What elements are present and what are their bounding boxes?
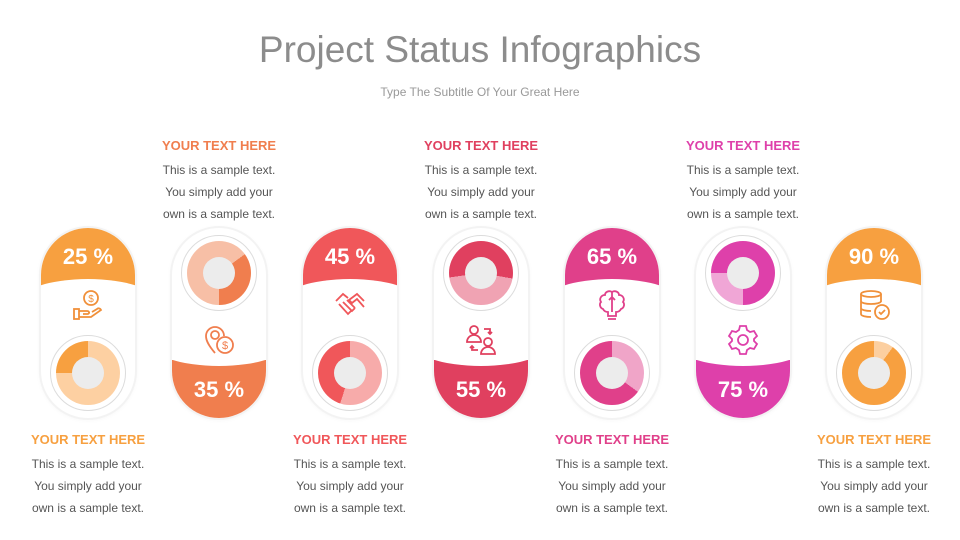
donut 45% [312,335,388,411]
donut 25% [50,335,126,411]
icon: handshake [335,292,365,316]
text block 5: You simply add your [558,479,666,493]
text block 2: This is a sample text. [163,163,275,177]
pill 6 [696,228,790,418]
pill 2 [172,228,266,418]
text block 5: own is a sample text. [556,501,668,515]
text block 3: This is a sample text. [294,457,406,471]
pill 7 [827,228,921,418]
text block 2: You simply add your [165,185,273,199]
text block 2: own is a sample text. [163,207,275,221]
text block 3: YOUR TEXT HERE [293,432,407,447]
text block 7: own is a sample text. [818,501,930,515]
text block 1: You simply add your [34,479,142,493]
text block 4: This is a sample text. [425,163,537,177]
text block 6: This is a sample text. [687,163,799,177]
text block 3 [293,432,407,515]
text block 7: YOUR TEXT HERE [817,432,931,447]
text block 4: YOUR TEXT HERE [424,138,538,153]
text block 4 [424,138,538,221]
pill 1: 25 % [63,244,113,269]
donut 65% [574,335,650,411]
icon: hand coin: $ [88,294,94,305]
text block 6 [686,138,800,221]
donut 75% [705,235,781,311]
pill 2: 35 % [194,377,244,402]
icon: gear [728,325,758,355]
pill 6: 75 % [718,377,768,402]
text block 7 [817,432,931,515]
pill 5: 65 % [587,244,637,269]
pill 3: 45 % [325,244,375,269]
title: Project Status Infographics [259,29,701,70]
text block 5 [555,432,669,515]
pill 5 [565,228,659,418]
text block 2 [162,138,276,221]
text block 1: own is a sample text. [32,501,144,515]
text block 6: You simply add your [689,185,797,199]
text block 5: This is a sample text. [556,457,668,471]
text block 7: You simply add your [820,479,928,493]
text block 3: You simply add your [296,479,404,493]
text block 1: YOUR TEXT HERE [31,432,145,447]
pill 3 [303,228,397,418]
text block 4: You simply add your [427,185,535,199]
donut 35% [181,235,257,311]
subtitle: Type The Subtitle Of Your Great Here [380,85,580,99]
pill 4 [434,228,528,418]
pill 1 [41,228,135,418]
text block 2: YOUR TEXT HERE [162,138,276,153]
text block 7: This is a sample text. [818,457,930,471]
pill 4: 55 % [456,377,506,402]
text block 4: own is a sample text. [425,207,537,221]
pill 7: 90 % [849,244,899,269]
icon: location dollar: $ [222,340,228,352]
text block 1: This is a sample text. [32,457,144,471]
text block 1 [31,432,145,515]
donut 90% [836,335,912,411]
donut 55% [443,235,519,311]
icon: database check [860,290,890,320]
icon: location dollar [205,326,234,354]
text block 3: own is a sample text. [294,501,406,515]
icon: brain bulb [599,290,625,320]
icon: people exchange [466,325,496,355]
text block 6: own is a sample text. [687,207,799,221]
icon: hand coin [73,290,102,320]
text block 6: YOUR TEXT HERE [686,138,800,153]
text block 5: YOUR TEXT HERE [555,432,669,447]
